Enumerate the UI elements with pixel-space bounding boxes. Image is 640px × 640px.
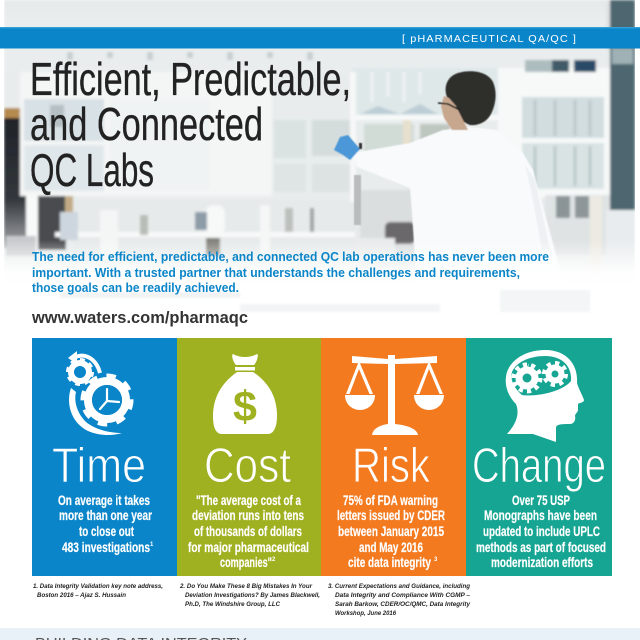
body: change: updated to include UPLC xyxy=(483,524,600,539)
footnote 2: Ph.D, The Windshire Group, LLC xyxy=(185,602,281,608)
body: cost: for major pharmaceutical xyxy=(188,540,309,555)
icon: money bag: $ xyxy=(233,383,257,431)
coat xyxy=(352,127,566,300)
body: time xyxy=(58,493,154,555)
body: time: On average it takes xyxy=(58,493,150,508)
title: Efficient, Predictable, xyxy=(30,53,351,105)
title xyxy=(30,53,351,196)
body: change xyxy=(476,493,606,570)
icon: head with gears xyxy=(506,350,584,442)
heading: change: Change xyxy=(472,439,606,493)
panel: time xyxy=(32,338,177,576)
header band xyxy=(0,27,640,48)
title: QC Labs xyxy=(30,144,154,196)
footnote 3: Workshop, June 2016 xyxy=(335,611,397,617)
body: cost: companies" xyxy=(220,555,272,570)
footnote 3: Sarah Barkow, CDER/OC/QMC, Data Integrity xyxy=(335,602,471,608)
body: cost xyxy=(188,493,309,570)
body: risk: and May 2016 xyxy=(359,540,423,555)
body: change: modernization efforts xyxy=(491,555,593,570)
footnote 1: 1. Data Integrity Validation key note address, xyxy=(33,584,163,590)
intro paragraph: those goals can be readily achieved. xyxy=(32,280,239,295)
footnote 3 xyxy=(328,584,471,617)
body: risk xyxy=(337,493,445,570)
panel: risk xyxy=(321,338,466,576)
intro paragraph: important. With a trusted partner that understands the challenges and requirements, xyxy=(32,265,520,280)
body: time: to close out xyxy=(79,524,134,539)
body: risk: between January 2015 xyxy=(338,524,444,539)
heading: cost: Cost xyxy=(204,439,291,493)
heading: time: Time xyxy=(52,439,146,493)
body: cost: deviation runs into tens xyxy=(192,508,304,523)
section label: [ pHARMACEUTICAL QA/QC ] xyxy=(402,34,577,45)
body: risk: 3 xyxy=(434,557,438,563)
intro paragraph: The need for efficient, predictable, and connected QC lab operations has never been more xyxy=(32,249,549,264)
title: and Connected xyxy=(30,98,263,150)
icon: balance scale xyxy=(345,355,444,435)
body: change: Monographs have been xyxy=(484,508,597,523)
body: time: 1 xyxy=(150,542,154,548)
body: risk: 75% of FDA warning xyxy=(343,493,438,508)
body: time: more than one year xyxy=(59,508,153,523)
icon: money bag xyxy=(213,354,277,434)
footnote 2 xyxy=(179,584,320,608)
body: risk: cite data integrity xyxy=(348,555,431,570)
body: change: Over 75 USP xyxy=(512,493,570,508)
heading: risk: Risk xyxy=(352,439,430,493)
body: cost: 2 xyxy=(272,557,276,563)
footnote 1: Boston 2016 – Ajaz S. Hussain xyxy=(37,593,126,599)
body: cost: "The average cost of a xyxy=(196,493,301,508)
panel: change xyxy=(466,338,612,576)
footnote 2: Deviation Investigations? By James Blackwell, xyxy=(185,593,320,599)
glove xyxy=(334,135,360,160)
next section band xyxy=(0,628,640,640)
scientist xyxy=(334,71,566,300)
footnote 3: 3. Current Expectations and Guidance, including xyxy=(328,584,470,590)
panel: cost xyxy=(177,338,321,576)
head xyxy=(446,71,496,125)
photo fade xyxy=(0,240,640,286)
website url: www.waters.com/pharmaqc xyxy=(31,308,248,327)
footnote 2: 2. Do You Make These 8 Big Mistakes In Your xyxy=(179,584,313,590)
intro paragraph xyxy=(32,249,549,295)
body: time: 483 investigations xyxy=(62,540,150,555)
body: risk: letters issued by CDER xyxy=(337,508,445,523)
icon: gears and clock xyxy=(68,351,130,435)
body: cost: of thousands of dollars xyxy=(194,524,302,539)
background photo: lab with scientist xyxy=(0,0,640,340)
glasses xyxy=(438,103,460,110)
footnote 1 xyxy=(33,584,163,599)
footnote 3: Data Integrity and Compliance With CGMP – xyxy=(335,593,471,599)
